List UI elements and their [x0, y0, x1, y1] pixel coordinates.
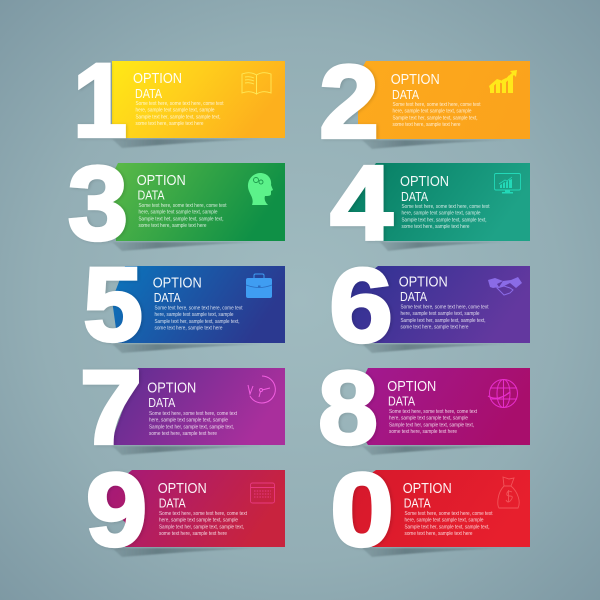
digit 0: 0	[330, 452, 394, 568]
subheading 7: DATA	[148, 396, 176, 410]
body text 8	[389, 409, 477, 435]
heading 6: OPTION	[399, 274, 448, 291]
icon: calendar	[250, 483, 274, 503]
heading 7: OPTION	[147, 380, 196, 397]
body text 4: Sample text her, sample text, sample text,	[402, 217, 487, 223]
heading 0: OPTION	[403, 480, 452, 497]
body text 6: Some text here, some text here, come text	[400, 304, 489, 310]
panel 2: option data	[319, 44, 530, 160]
heading 8: OPTION	[387, 378, 436, 395]
icon: monitor chart	[494, 174, 520, 194]
body text 0	[404, 511, 493, 537]
body text 9: here, sample text sample text, sample	[159, 518, 238, 524]
icon: growth chart	[489, 70, 517, 93]
digit 3: 3	[68, 144, 128, 262]
body text 3: some text here, sample text here	[138, 223, 206, 229]
body text 1	[136, 101, 224, 127]
panel 0: option data	[330, 452, 530, 568]
body text 5: here, sample text sample text, sample	[154, 312, 234, 318]
subheading 5: DATA	[154, 291, 181, 305]
body text 0: some text here, sample text here	[404, 531, 472, 537]
body text 7: here, sample text sample text, sample	[149, 418, 228, 424]
digit 8: 8	[318, 350, 378, 466]
body text 6: some text here, sample text here	[400, 324, 468, 330]
body text 5: Sample text her, sample text, sample text,	[154, 319, 240, 325]
icon: briefcase	[246, 274, 272, 298]
subheading 9: DATA	[159, 496, 186, 510]
icon: money bag	[498, 477, 519, 508]
subheading 0: DATA	[404, 496, 431, 510]
body text 6: here, sample text sample text, sample	[400, 311, 480, 317]
body text 1: some text here, sample text here	[136, 121, 204, 127]
subheading 6: DATA	[400, 290, 428, 304]
panel 7: option data	[80, 350, 285, 467]
icon: clock with arrow	[248, 376, 275, 403]
digit 2: 2	[319, 44, 379, 160]
subheading 4: DATA	[401, 190, 429, 204]
body text 8: Some text here, some text here, come text	[389, 409, 477, 415]
heading 4: OPTION	[400, 173, 449, 190]
body text 7	[149, 411, 237, 437]
body text 5	[154, 306, 243, 332]
digit 9: 9	[86, 451, 147, 568]
digit 7: 7	[80, 350, 142, 467]
icon: book	[242, 73, 271, 94]
body text 4: here, sample text sample text, sample	[402, 211, 480, 217]
body text 9: Sample text her, sample text, sample text,	[159, 524, 244, 530]
panel 5: option data	[83, 246, 285, 363]
panel 8: option data	[318, 350, 530, 466]
body text 4	[402, 204, 490, 230]
body text 0: Sample text her, sample text, sample text,	[404, 524, 490, 530]
body text 3: Sample text het, sample text, sample text,	[138, 216, 224, 222]
body text 7: some text here, sample text here	[149, 431, 217, 437]
panel 1: option data	[73, 43, 285, 159]
panel 3: option data	[68, 144, 285, 262]
panel 6: option data	[329, 248, 530, 364]
digit 1: 1	[73, 43, 127, 159]
body text 8: Sample text her, sample text, sample text,	[389, 422, 474, 428]
icon: head with gears	[248, 173, 273, 205]
body text 2: some text here, sample text here	[392, 122, 460, 128]
digit 6: 6	[329, 248, 393, 364]
subheading 2: DATA	[392, 88, 420, 102]
body text 6	[400, 304, 489, 330]
body text 1: Sample text her, sample text, sample text,	[136, 114, 221, 120]
body text 7: Sample text her, sample text, sample text,	[149, 424, 234, 430]
body text 4: some text here, sample text here	[402, 224, 470, 230]
icon: handshake	[488, 277, 522, 295]
body text 2	[392, 102, 481, 128]
icon: globe	[488, 380, 518, 408]
body text 3	[138, 203, 227, 229]
body text 3: here, sample text sample text, sample	[138, 210, 218, 216]
digit 4: 4	[330, 144, 393, 263]
body text 3: Some text here, some text here, come text	[138, 203, 227, 209]
digit 5: 5	[83, 246, 143, 363]
subheading 1: DATA	[135, 87, 163, 101]
heading 5: OPTION	[153, 275, 202, 292]
body text 9: Some text here, some text here, come text	[159, 511, 247, 517]
heading 9: OPTION	[158, 480, 207, 497]
body text 1: Some text here, some text here, come text	[136, 101, 224, 107]
heading 1: OPTION	[133, 70, 182, 87]
heading 3: OPTION	[137, 172, 186, 189]
body text 2: Sample text her, sample text, sample text,	[392, 115, 478, 121]
body text 0: here, sample text sample text, sample	[404, 518, 484, 524]
body text 5: some text here, sample text here	[154, 326, 222, 332]
body text 1: here, sample text sample text, sample	[136, 108, 214, 114]
body text 7: Some text here, some text here, come text	[149, 411, 237, 417]
panel 4: option data	[330, 144, 530, 263]
body text 6: Sample text her, sample text, sample text,	[400, 318, 486, 324]
body text 8: here, sample text sample text, sample	[389, 416, 468, 422]
subheading 8: DATA	[388, 394, 416, 408]
body text 4: Some text here, some text here, come text	[402, 204, 490, 210]
heading 2: OPTION	[391, 71, 440, 88]
body text 2: here, sample text sample text, sample	[392, 109, 472, 115]
body text 9	[159, 511, 247, 537]
subheading 3: DATA	[138, 188, 165, 202]
body text 5: Some text here, some text here, come text	[154, 306, 243, 312]
panel 9: option data	[86, 451, 285, 568]
body text 8: some text here, sample text here	[389, 429, 457, 435]
body text 9: some text here, sample text here	[159, 531, 227, 537]
body text 2: Some text here, some text here, come text	[392, 102, 481, 108]
body text 0: Some text here, some text here, come text	[404, 511, 493, 517]
